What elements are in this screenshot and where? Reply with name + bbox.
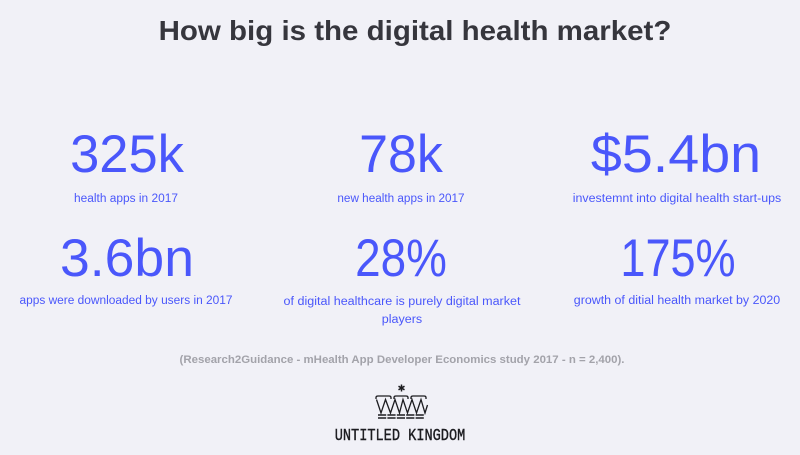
title: How big is the digital health market?	[159, 15, 671, 46]
caption: investment: investemnt into digital health start-ups	[572, 193, 781, 205]
stat: 175%: 175%	[620, 229, 735, 288]
caption: new health apps: new health apps in 2017	[337, 193, 465, 205]
stat: 325k: 325k	[70, 125, 184, 184]
stat: $5.4bn: $5.4bn	[591, 125, 761, 184]
caption: digital healthcare	[283, 296, 520, 326]
caption: growth: growth of ditial health market by 2020	[573, 295, 780, 307]
stat: 28%: 28%	[355, 229, 447, 288]
icon: crown	[375, 384, 428, 419]
caption: digital healthcare: players	[381, 314, 422, 326]
source note: (Research2Guidance - mHealth App Developer Economics study 2017 - n = 2,400).	[179, 354, 624, 366]
stat: 3.6bn: 3.6bn	[60, 229, 193, 288]
logo wordmark: UNTITLED KINGDOM	[335, 427, 465, 446]
caption: digital healthcare: of digital healthcare is purely digital market	[283, 296, 520, 308]
stat: 78k: 78k	[359, 125, 443, 184]
caption: health apps: health apps in 2017	[74, 193, 178, 205]
caption: apps downloaded: apps were downloaded by users in 2017	[19, 295, 233, 307]
logo: Untitled Kingdom	[335, 384, 465, 446]
